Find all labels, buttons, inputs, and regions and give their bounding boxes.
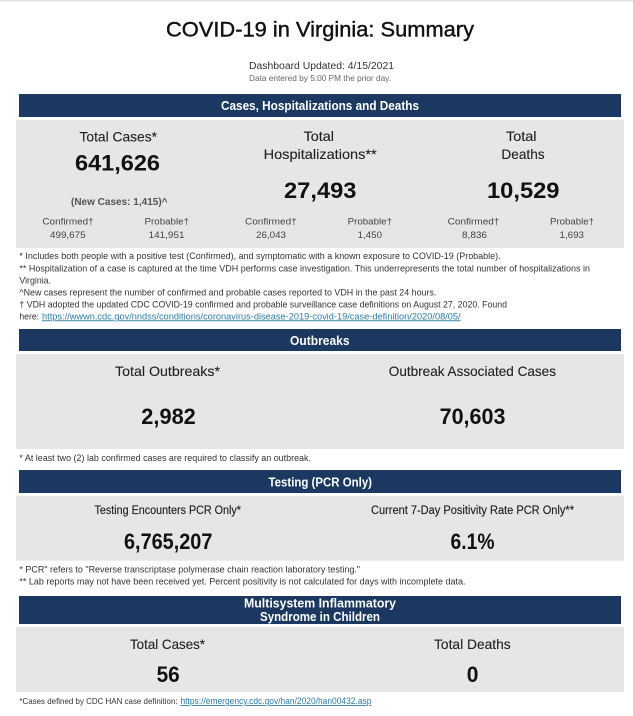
testing encounters metric: Testing Encounters PCR Only*	[94, 505, 241, 517]
total hospitalizations metric: 27,493	[284, 178, 356, 203]
total deaths metric: Confirmed†	[448, 217, 499, 228]
total deaths metric: 8,836	[462, 230, 487, 241]
total deaths metric: 10,529	[487, 178, 560, 203]
title: COVID-19 in Virginia: Summary	[166, 19, 475, 42]
section header: testing	[19, 470, 621, 493]
footnotes: cases: Virginia.	[19, 276, 51, 286]
footnotes: cases: ^New cases represent the number of confirmed and probable cases reported to VDH in the past 24 hours.	[19, 287, 436, 297]
positivity rate metric: 6.1%	[450, 529, 494, 554]
section header: outbreaks: Outbreaks	[290, 334, 350, 348]
footnotes: testing: * PCR" refers to "Reverse transcriptase polymerase chain reaction laboratory testing."	[19, 564, 360, 574]
footnote: case definition	[19, 696, 371, 706]
section header: multisystem inflammatory syndrome in children: Syndrome in Children	[260, 610, 380, 624]
footnotes: cases	[19, 251, 590, 321]
section header: multisystem inflammatory syndrome in children	[19, 596, 621, 624]
total hospitalizations metric	[245, 128, 392, 241]
footnotes: testing	[19, 564, 466, 586]
MIS-C total deaths metric	[434, 636, 511, 687]
total deaths metric	[448, 128, 594, 241]
footnote: case definition: *Cases defined by CDC HAN case definition:	[19, 696, 178, 706]
total hospitalizations metric: Probable†	[348, 217, 392, 228]
section header: testing: Testing (PCR Only)	[268, 476, 372, 490]
panel: testing	[16, 496, 624, 561]
section header: multisystem inflammatory syndrome in children: Multisystem Inflammatory	[244, 597, 396, 611]
total cases metric: 641,626	[75, 151, 160, 176]
panel: cases, hospitalizations and deaths	[16, 120, 624, 248]
footnote: case definition: https://emergency.cdc.gov/han/2020/han00432.asp	[180, 696, 371, 706]
total deaths metric: Probable†	[550, 217, 594, 228]
total hospitalizations metric: Confirmed†	[245, 217, 297, 228]
total outbreaks metric	[115, 363, 221, 429]
total cases metric: Probable†	[144, 217, 189, 228]
total cases metric: Total Cases*	[80, 129, 158, 145]
MIS-C total cases metric	[130, 636, 206, 687]
footnotes: testing: ** Lab reports may not have been received yet. Percent positivity is not calculated for days with incomplete data.	[19, 576, 466, 586]
total deaths metric: 1,693	[560, 230, 584, 241]
panel: multisystem inflammatory syndrome	[16, 627, 624, 692]
total outbreaks metric: Total Outbreaks*	[115, 363, 221, 379]
section header: cases, hospitalizations and deaths	[19, 94, 621, 117]
footnotes: cases: https://wwwn.cdc.gov/nndss/conditions/coronavirus-disease-2019-covid-19/case-definition/2020/08/05/	[42, 311, 461, 321]
MIS-C total deaths metric: Total Deaths	[434, 636, 511, 652]
total cases metric: 141,951	[149, 230, 184, 241]
positivity rate metric	[371, 505, 574, 554]
MIS-C total deaths metric: 0	[467, 662, 478, 687]
MIS-C total cases metric: 56	[157, 662, 180, 687]
outbreak associated cases metric	[389, 363, 556, 429]
footnotes: cases: * Includes both people with a positive test (Confirmed), and symptomatic with a known exposure to COVID-19 (Probable).	[19, 251, 501, 261]
total hospitalizations metric: Hospitalizations**	[264, 146, 377, 162]
dashboard update note: Data entered by 5:00 PM the prior day.	[249, 73, 391, 83]
dashboard update note	[249, 61, 394, 83]
outbreak associated cases metric: Outbreak Associated Cases	[389, 363, 556, 379]
positivity rate metric: Current 7-Day Positivity Rate PCR Only**	[371, 505, 574, 517]
testing encounters metric: 6,765,207	[124, 529, 212, 554]
total cases metric: Confirmed†	[42, 217, 94, 228]
total hospitalizations metric: 26,043	[256, 230, 286, 241]
total cases metric: (New Cases: 1,415)^	[71, 196, 168, 208]
outbreak associated cases metric: 70,603	[440, 404, 506, 429]
footnotes: cases: † VDH adopted the updated CDC COVID-19 confirmed and probable surveillance case definitions on August 27, 2020. Found	[19, 299, 507, 309]
total cases metric	[42, 129, 189, 241]
MIS-C total cases metric: Total Cases*	[130, 636, 206, 652]
testing encounters metric	[94, 505, 241, 554]
section header: cases, hospitalizations and deaths: Cases, Hospitalizations and Deaths	[221, 99, 419, 113]
total deaths metric: Deaths	[501, 146, 545, 162]
footnotes: cases: here:	[19, 311, 39, 321]
total hospitalizations metric: Total	[304, 128, 334, 144]
total cases metric: 499,675	[50, 230, 86, 241]
footnote: outbreaks: * At least two (2) lab confirmed cases are required to classify an outbreak.	[19, 453, 311, 463]
dashboard update note: Dashboard Updated: 4/15/2021	[249, 61, 394, 72]
total outbreaks metric: 2,982	[141, 404, 196, 429]
total deaths metric: Total	[506, 128, 536, 144]
total hospitalizations metric: 1,450	[358, 230, 382, 241]
footnotes: cases: ** Hospitalization of a case is captured at the time VDH performs case investigation. This underrepresents the total number of hospitalizations in	[19, 264, 590, 274]
panel: outbreaks	[16, 354, 624, 449]
section header: outbreaks	[19, 329, 621, 351]
